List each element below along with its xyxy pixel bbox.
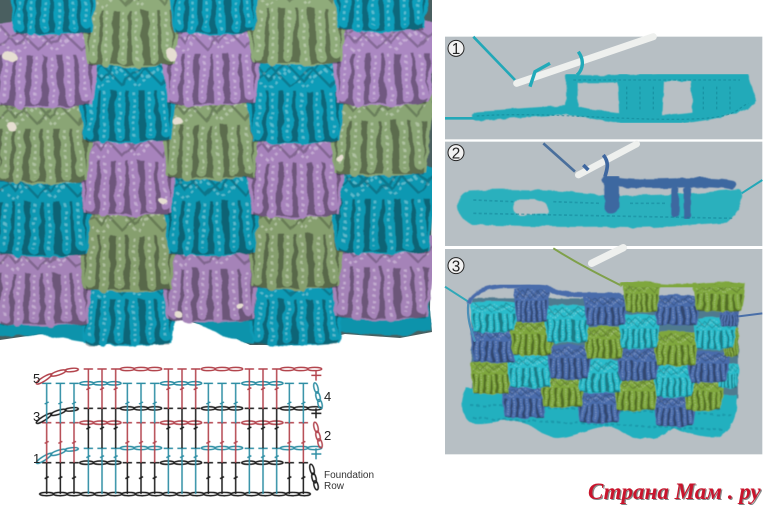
row 3 symbols bbox=[35, 407, 322, 448]
top chain loops bbox=[468, 285, 622, 303]
foundation row symbols bbox=[40, 461, 319, 496]
panel: photo step 2 bbox=[445, 142, 762, 246]
step number 2 bbox=[448, 145, 464, 162]
stitch texture bbox=[477, 80, 748, 119]
foundation row label bbox=[324, 470, 374, 492]
working loop bbox=[583, 155, 607, 177]
crochet hook bbox=[517, 37, 653, 83]
row 4 symbols bbox=[42, 382, 323, 423]
step number 2: 2 bbox=[452, 145, 460, 162]
teal crochet row bbox=[457, 189, 742, 228]
panel: photo step 1 bbox=[445, 37, 762, 139]
row 1 symbols bbox=[35, 446, 322, 494]
row 5 symbols bbox=[35, 367, 322, 409]
chart labels: 5 bbox=[33, 371, 40, 386]
crochet hook bbox=[578, 144, 637, 175]
chart labels: 1 bbox=[33, 451, 40, 466]
blue new row bbox=[607, 178, 732, 217]
tail yarn bbox=[445, 37, 515, 118]
swatch bottom scalloped edge bbox=[0, 301, 432, 344]
crochet hook bbox=[592, 248, 623, 263]
crochet piece with openings bbox=[477, 76, 755, 120]
step number 3: 3 bbox=[452, 258, 460, 275]
left side thread bbox=[468, 303, 475, 342]
top green chain bbox=[620, 282, 740, 287]
step number 1 bbox=[448, 40, 464, 58]
chart labels: 4 bbox=[324, 389, 331, 404]
foundation row label: Row bbox=[324, 481, 345, 492]
chart labels: 3 bbox=[33, 409, 40, 424]
row 2 symbols bbox=[42, 421, 323, 463]
chart: crochet stitch diagram bbox=[35, 367, 323, 496]
chart labels bbox=[33, 371, 331, 466]
watermark: Страна Мам . ру bbox=[588, 479, 761, 504]
step number 3 bbox=[448, 258, 464, 275]
step number 1: 1 bbox=[452, 41, 460, 58]
small swatch bbox=[462, 281, 745, 439]
working loop bbox=[530, 52, 582, 87]
watermark: Страна Мам . ру bbox=[589, 480, 763, 505]
foundation row label: Foundation bbox=[324, 470, 374, 481]
threads bbox=[543, 143, 575, 172]
chart labels: 2 bbox=[324, 428, 331, 443]
panel: photo step 3 bbox=[445, 248, 762, 454]
gaps between stitches bbox=[3, 49, 344, 317]
panel: large crochet swatch photo bbox=[0, 0, 437, 346]
threads bbox=[553, 248, 620, 285]
